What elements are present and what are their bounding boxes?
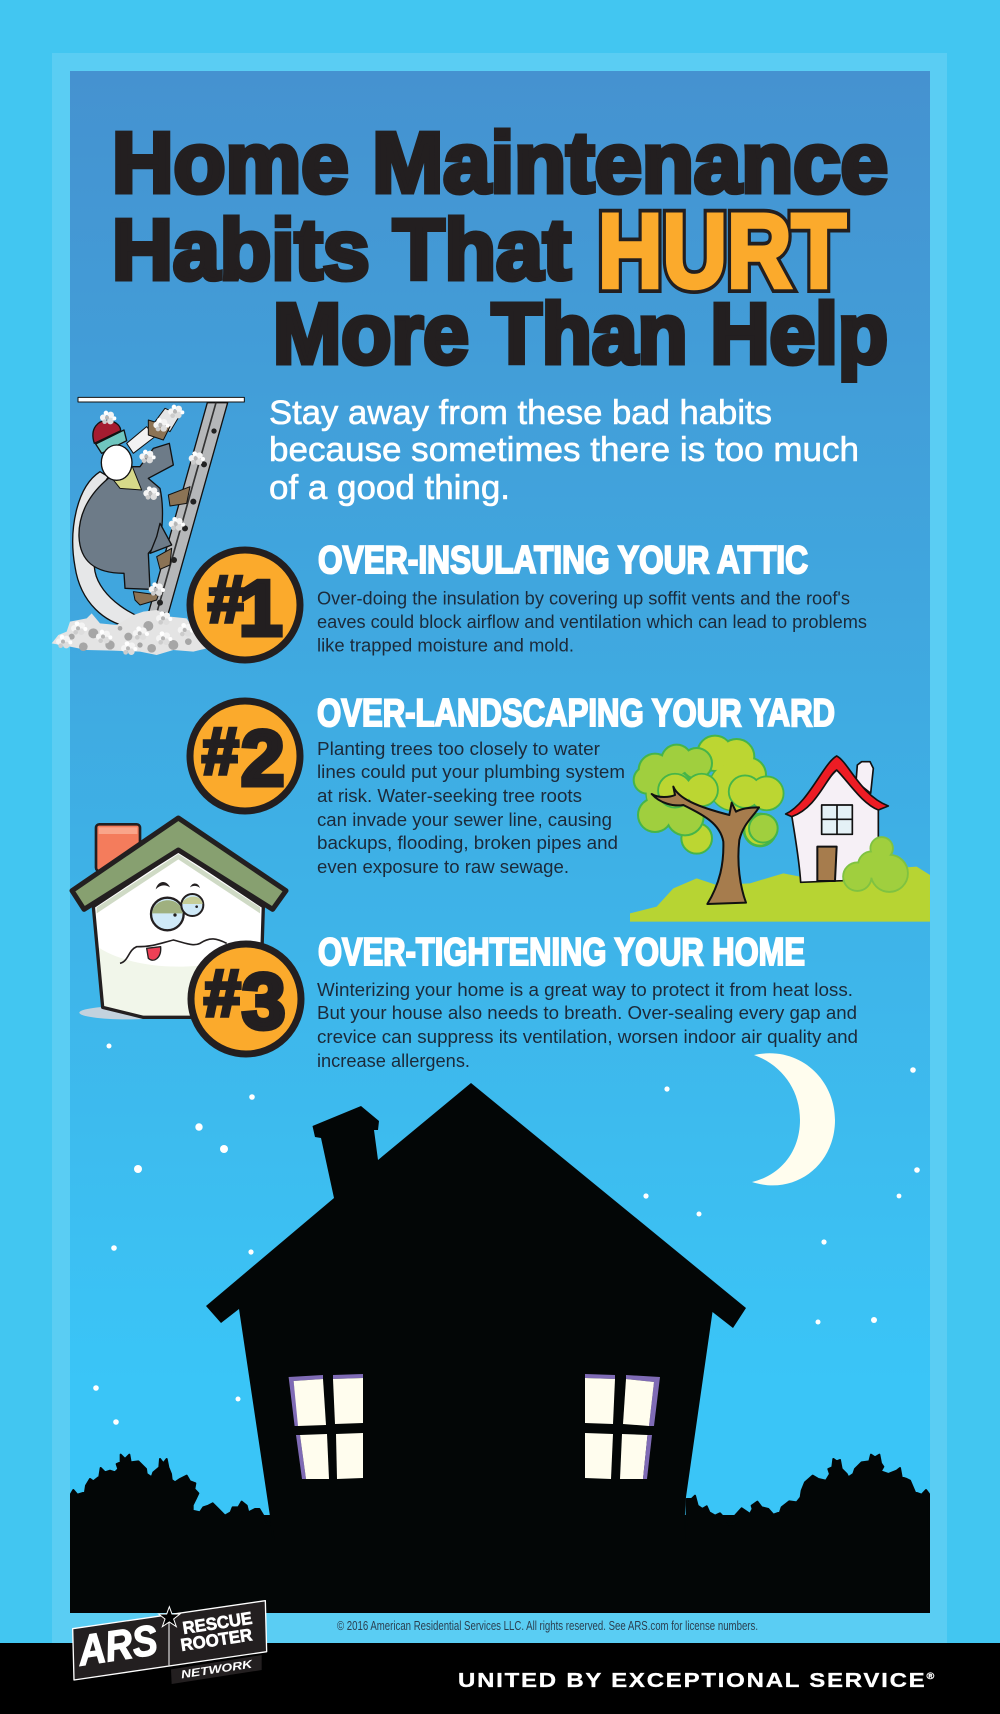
heading 3: OVER-TIGHTENING YOUR HOME [318,931,805,974]
insulation flakes [100,405,205,596]
insulation hose [73,472,190,634]
logo text: RESCUE [181,1608,253,1638]
coat [79,443,173,589]
logo box [73,1601,267,1680]
tree crown [634,736,783,853]
left window [289,1374,363,1479]
title: Home Maintenance [112,116,888,211]
body text 3: increase allergens. [317,1050,470,1071]
house body [206,1083,746,1530]
habit 1 text block [317,539,867,656]
tagline: UNITED BY EXCEPTIONAL SERVICE [458,1669,858,1692]
body text 2: lines could put your plumbing system [317,761,625,782]
logo text: NETWORK [180,1659,254,1681]
body text 2: at risk. Water-seeking tree roots [317,785,582,806]
head [93,421,132,480]
roof [72,818,286,909]
body text 3 [317,979,858,1071]
title [112,116,888,382]
body text 1: like trapped moisture and mold. [317,634,574,656]
badge #2 [190,701,300,811]
title: More Than Help [273,287,888,382]
body text 1: eaves could block airflow and ventilation which can lead to problems [317,611,867,632]
inner sky panel [70,71,930,1613]
badge #1: 1 [239,564,282,652]
icon: tree and small house [630,736,930,922]
body text 1 [317,588,867,656]
ground [70,1515,930,1613]
insulation pile [52,610,207,655]
body text 1: Over-doing the insulation by covering up soffit vents and the roof's [317,588,850,608]
subtitle: Stay away from these bad habits [269,394,772,432]
house silhouette with bushes [70,1083,930,1613]
lifted arm and canister [127,408,180,453]
body text 2: even exposure to raw sewage. [317,856,569,877]
logo text [74,1608,254,1681]
body text 2: can invade your sewer line, causing [317,809,612,830]
body text 2: backups, flooding, broken pipes and [317,832,618,853]
icon: sick house character [72,818,286,1019]
small house [786,756,888,882]
boots and glove [133,487,190,605]
title word HURT: HURT [598,193,846,310]
walls [93,850,263,1017]
heading 1: OVER-INSULATING YOUR ATTIC [318,539,808,582]
subtitle: because sometimes there is too much [269,431,859,469]
body text 2: Planting trees too closely to water [317,738,600,759]
body text 2 [317,738,625,877]
shirt [113,465,142,490]
habit 2 text block [317,692,835,877]
body text 3: crevice can suppress its ventilation, worsen indoor air quality and [317,1026,858,1047]
badge #2: # [202,714,239,788]
title: Habits That [112,203,571,298]
chimney [96,824,140,871]
black footer band [0,1643,1000,1714]
habit 3 text block [317,931,858,1071]
logo text: ARS [74,1616,161,1676]
badge #3 [191,944,301,1054]
heading 2: OVER-LANDSCAPING YOUR YARD [317,692,835,735]
ARS Rescue Rooter logo [73,1601,267,1684]
badge #2: 2 [241,714,284,802]
back lobes [682,736,776,853]
badge #1: # [208,562,245,636]
star [159,1607,180,1627]
copyright line: © 2016 American Residential Services LLC. All rights reserved. See ARS.com for license numbers. [337,1619,758,1633]
bushes [71,1455,929,1539]
ladder [148,403,228,613]
subtitle: of a good thing. [269,469,510,507]
ground [630,867,930,922]
left lobes [634,745,777,842]
tagline: ® [926,1671,936,1681]
face [120,882,227,963]
stars [93,1044,920,1425]
ceiling bar [78,397,244,402]
body text 3: Winterizing your home is a great way to protect it from heat loss. [317,979,853,1000]
title word HURT: HURT [598,193,846,310]
subtitle [269,394,859,507]
badge #3: 3 [242,957,285,1045]
body text 3: But your house also needs to breath. Over-sealing every gap and [317,1002,857,1023]
network tab [171,1655,262,1684]
badge #1 [190,550,300,660]
right window [585,1374,660,1479]
shadow [79,1006,174,1019]
logo text: ROOTER [179,1624,254,1655]
front lobes [658,774,783,810]
tree trunk [652,787,759,904]
bush [843,837,908,892]
badge #3: # [204,956,241,1030]
crescent moon [752,1053,835,1185]
icon: worker on ladder insulating attic [52,397,244,655]
